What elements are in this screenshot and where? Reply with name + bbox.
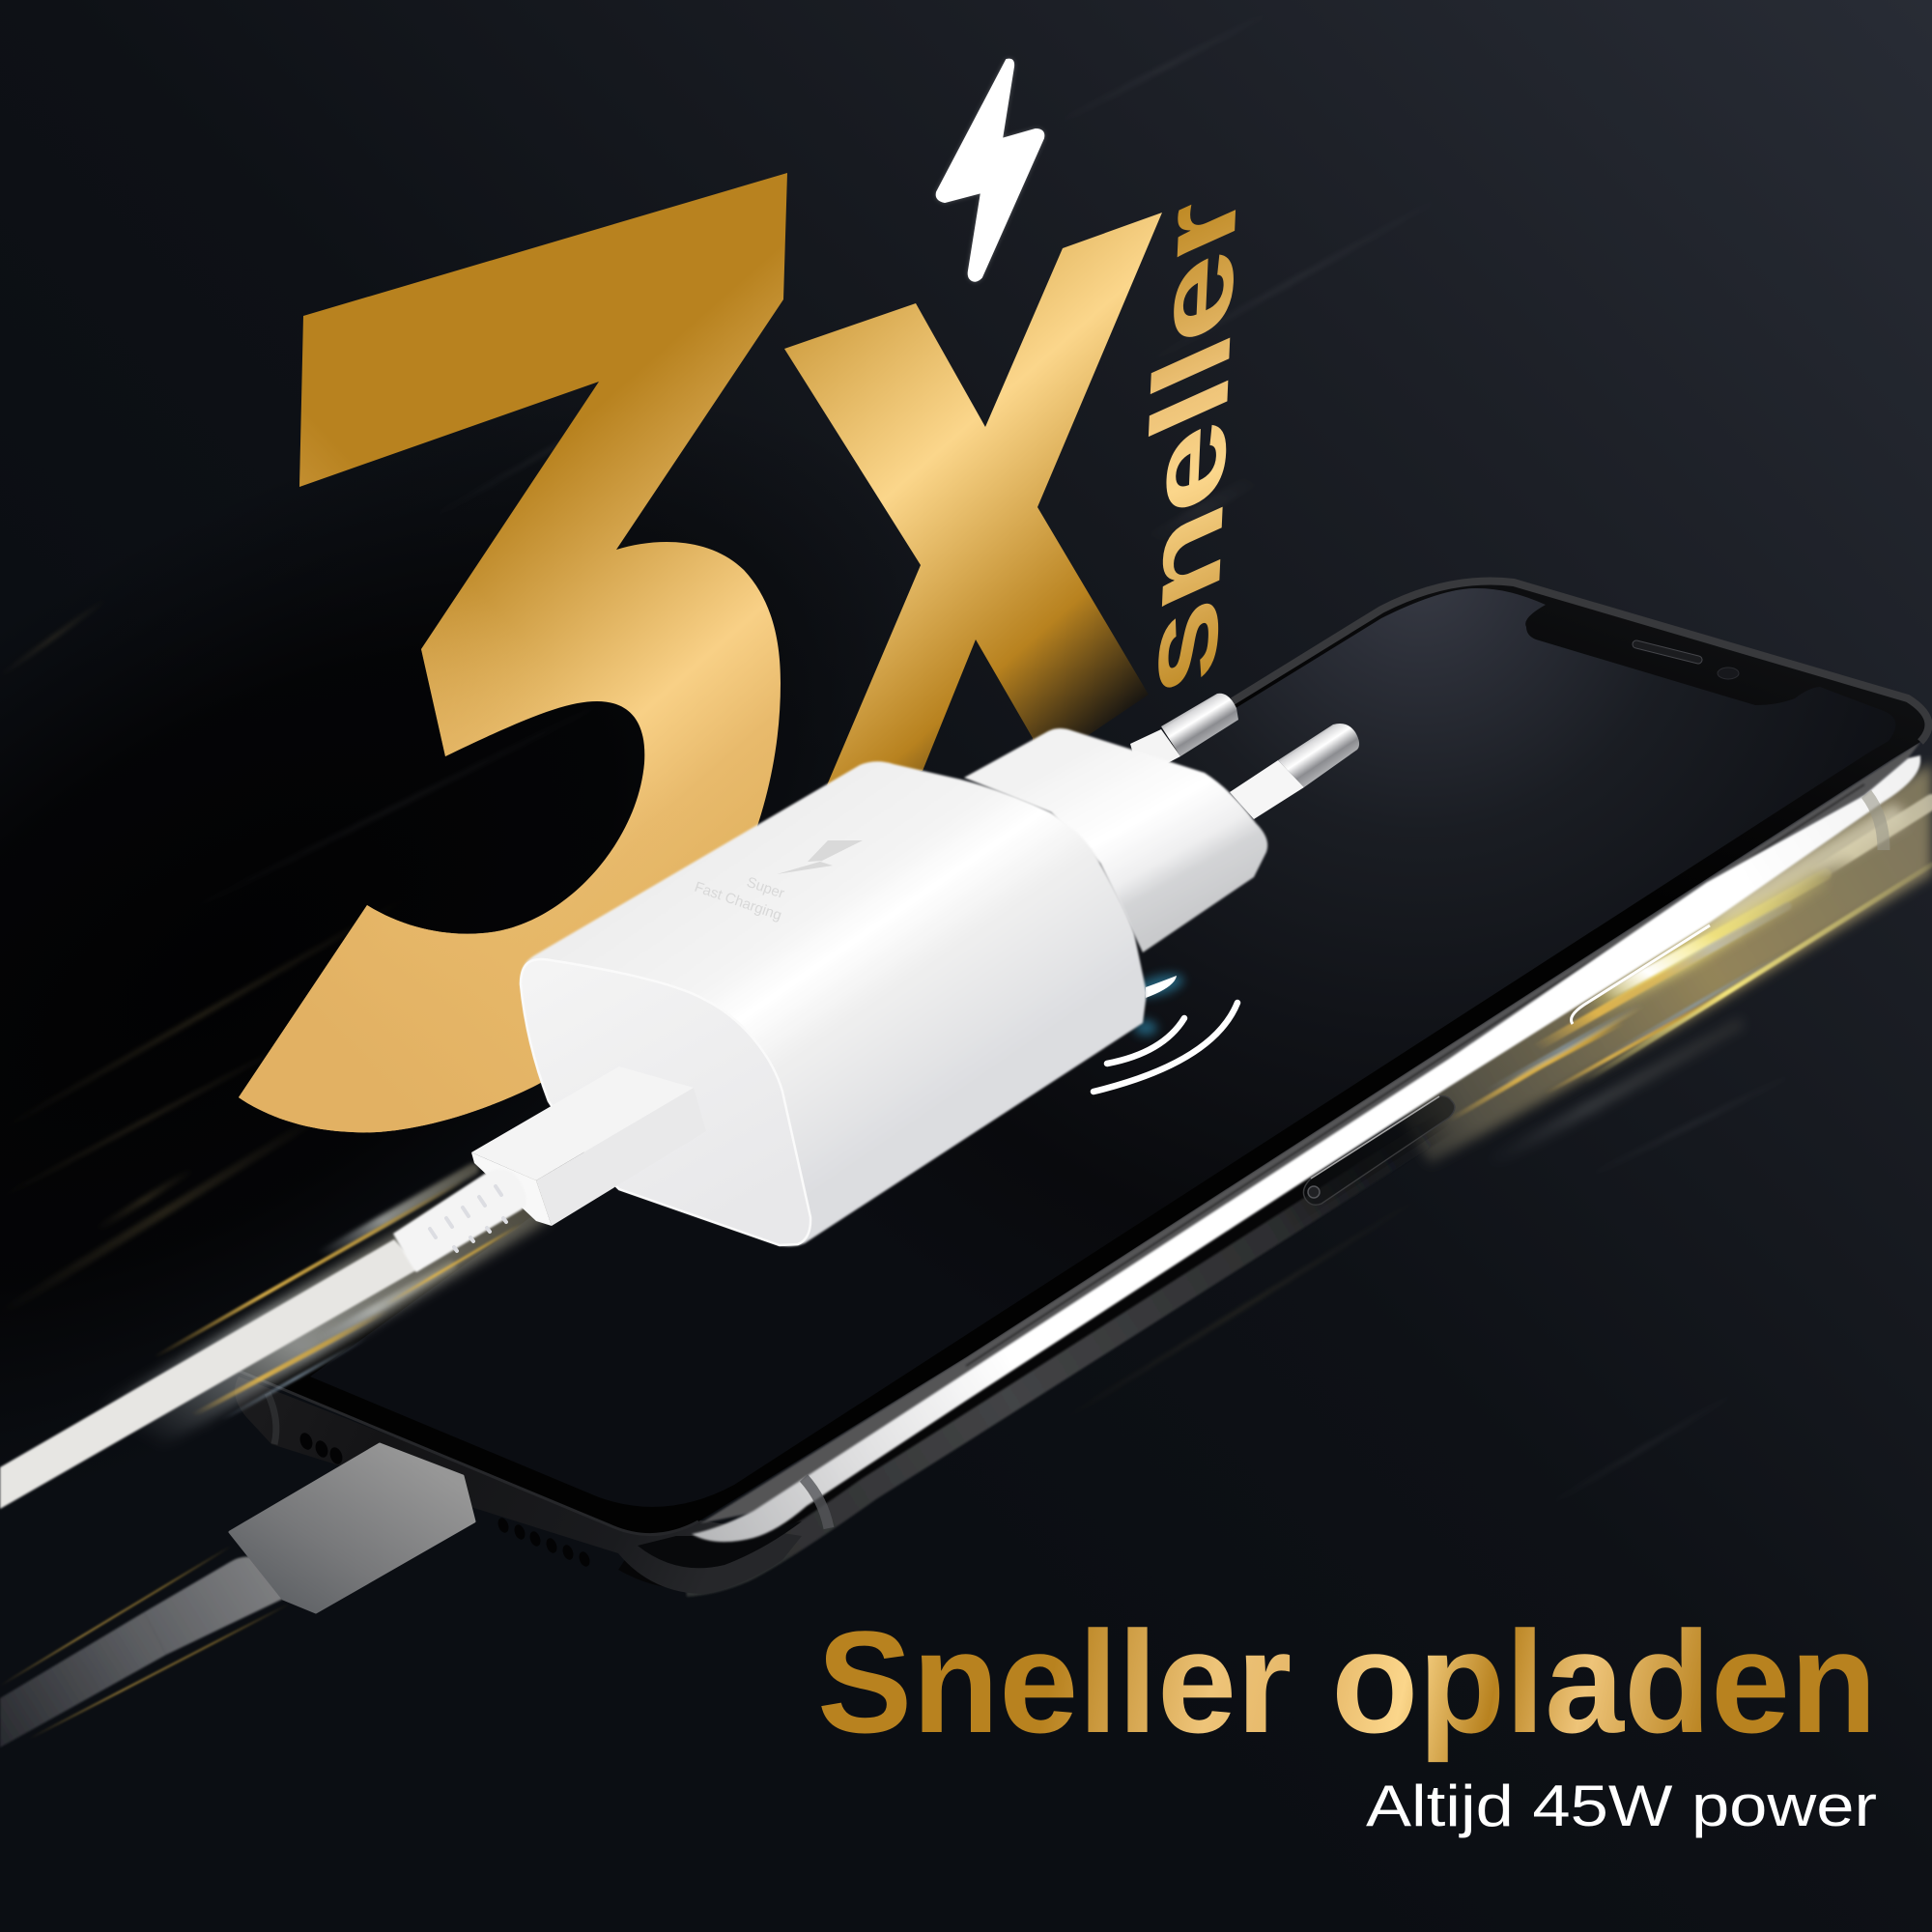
phone notch camera	[1718, 668, 1739, 679]
icon: bolt fragment	[1146, 976, 1177, 998]
phone glass	[239, 582, 1928, 1535]
usb-c plug	[471, 1066, 706, 1226]
phone antenna band	[804, 1478, 829, 1528]
embossed label: Super	[745, 874, 786, 902]
charge waves and glow	[1094, 970, 1237, 1092]
cable strain relief	[393, 1169, 526, 1272]
title: Sneller opladen	[817, 1601, 1877, 1763]
icon: inner wave	[1107, 1018, 1184, 1064]
phone top rim	[1233, 582, 1928, 742]
icon: outer wave	[1094, 1003, 1237, 1092]
phone bottom edge with speaker grilles	[235, 1377, 802, 1594]
subtitle: Altijd 45W power	[1366, 1774, 1877, 1838]
phone screen	[310, 588, 1895, 1507]
right side gold light flare	[1391, 763, 1932, 1164]
phone white side band	[692, 755, 1920, 1542]
white cable	[0, 1169, 526, 1509]
phone volume button	[1303, 1096, 1455, 1205]
large numeral 3	[239, 173, 787, 1132]
white charger	[471, 694, 1359, 1246]
phone side shadow band	[618, 1085, 1449, 1589]
cable flare	[116, 1169, 522, 1430]
reflected usb-c plug and cable	[0, 1444, 474, 1747]
icon: second glow	[1134, 1020, 1157, 1036]
icon: cyan glow	[1132, 970, 1186, 1001]
charger front face	[521, 959, 810, 1245]
background speed streaks	[0, 10, 1797, 1507]
bolt glow	[937, 60, 1043, 281]
phone power button	[1571, 925, 1710, 1024]
embossed label: Fast Charging	[693, 879, 783, 923]
dark shade inside the frame corner	[638, 1521, 802, 1568]
phone lower metal reflection	[686, 1121, 1449, 1584]
icon: lightning bolt	[937, 60, 1043, 281]
phone	[235, 582, 1928, 1594]
icon: embossed bolt	[777, 840, 863, 874]
flare base glow	[1391, 763, 1932, 1164]
phone side gray strip	[700, 742, 1920, 1523]
large letter X	[784, 213, 1162, 785]
phone antenna band upper	[1866, 794, 1884, 850]
pin one	[1130, 694, 1238, 778]
plug block	[964, 728, 1267, 952]
vertical word sneller: sneller	[1118, 171, 1261, 721]
phone lower rim	[239, 1371, 698, 1535]
phone notch speaker	[1632, 639, 1703, 665]
charger body	[521, 761, 1147, 1246]
bolt shape	[937, 60, 1043, 281]
pin two	[1230, 724, 1359, 819]
